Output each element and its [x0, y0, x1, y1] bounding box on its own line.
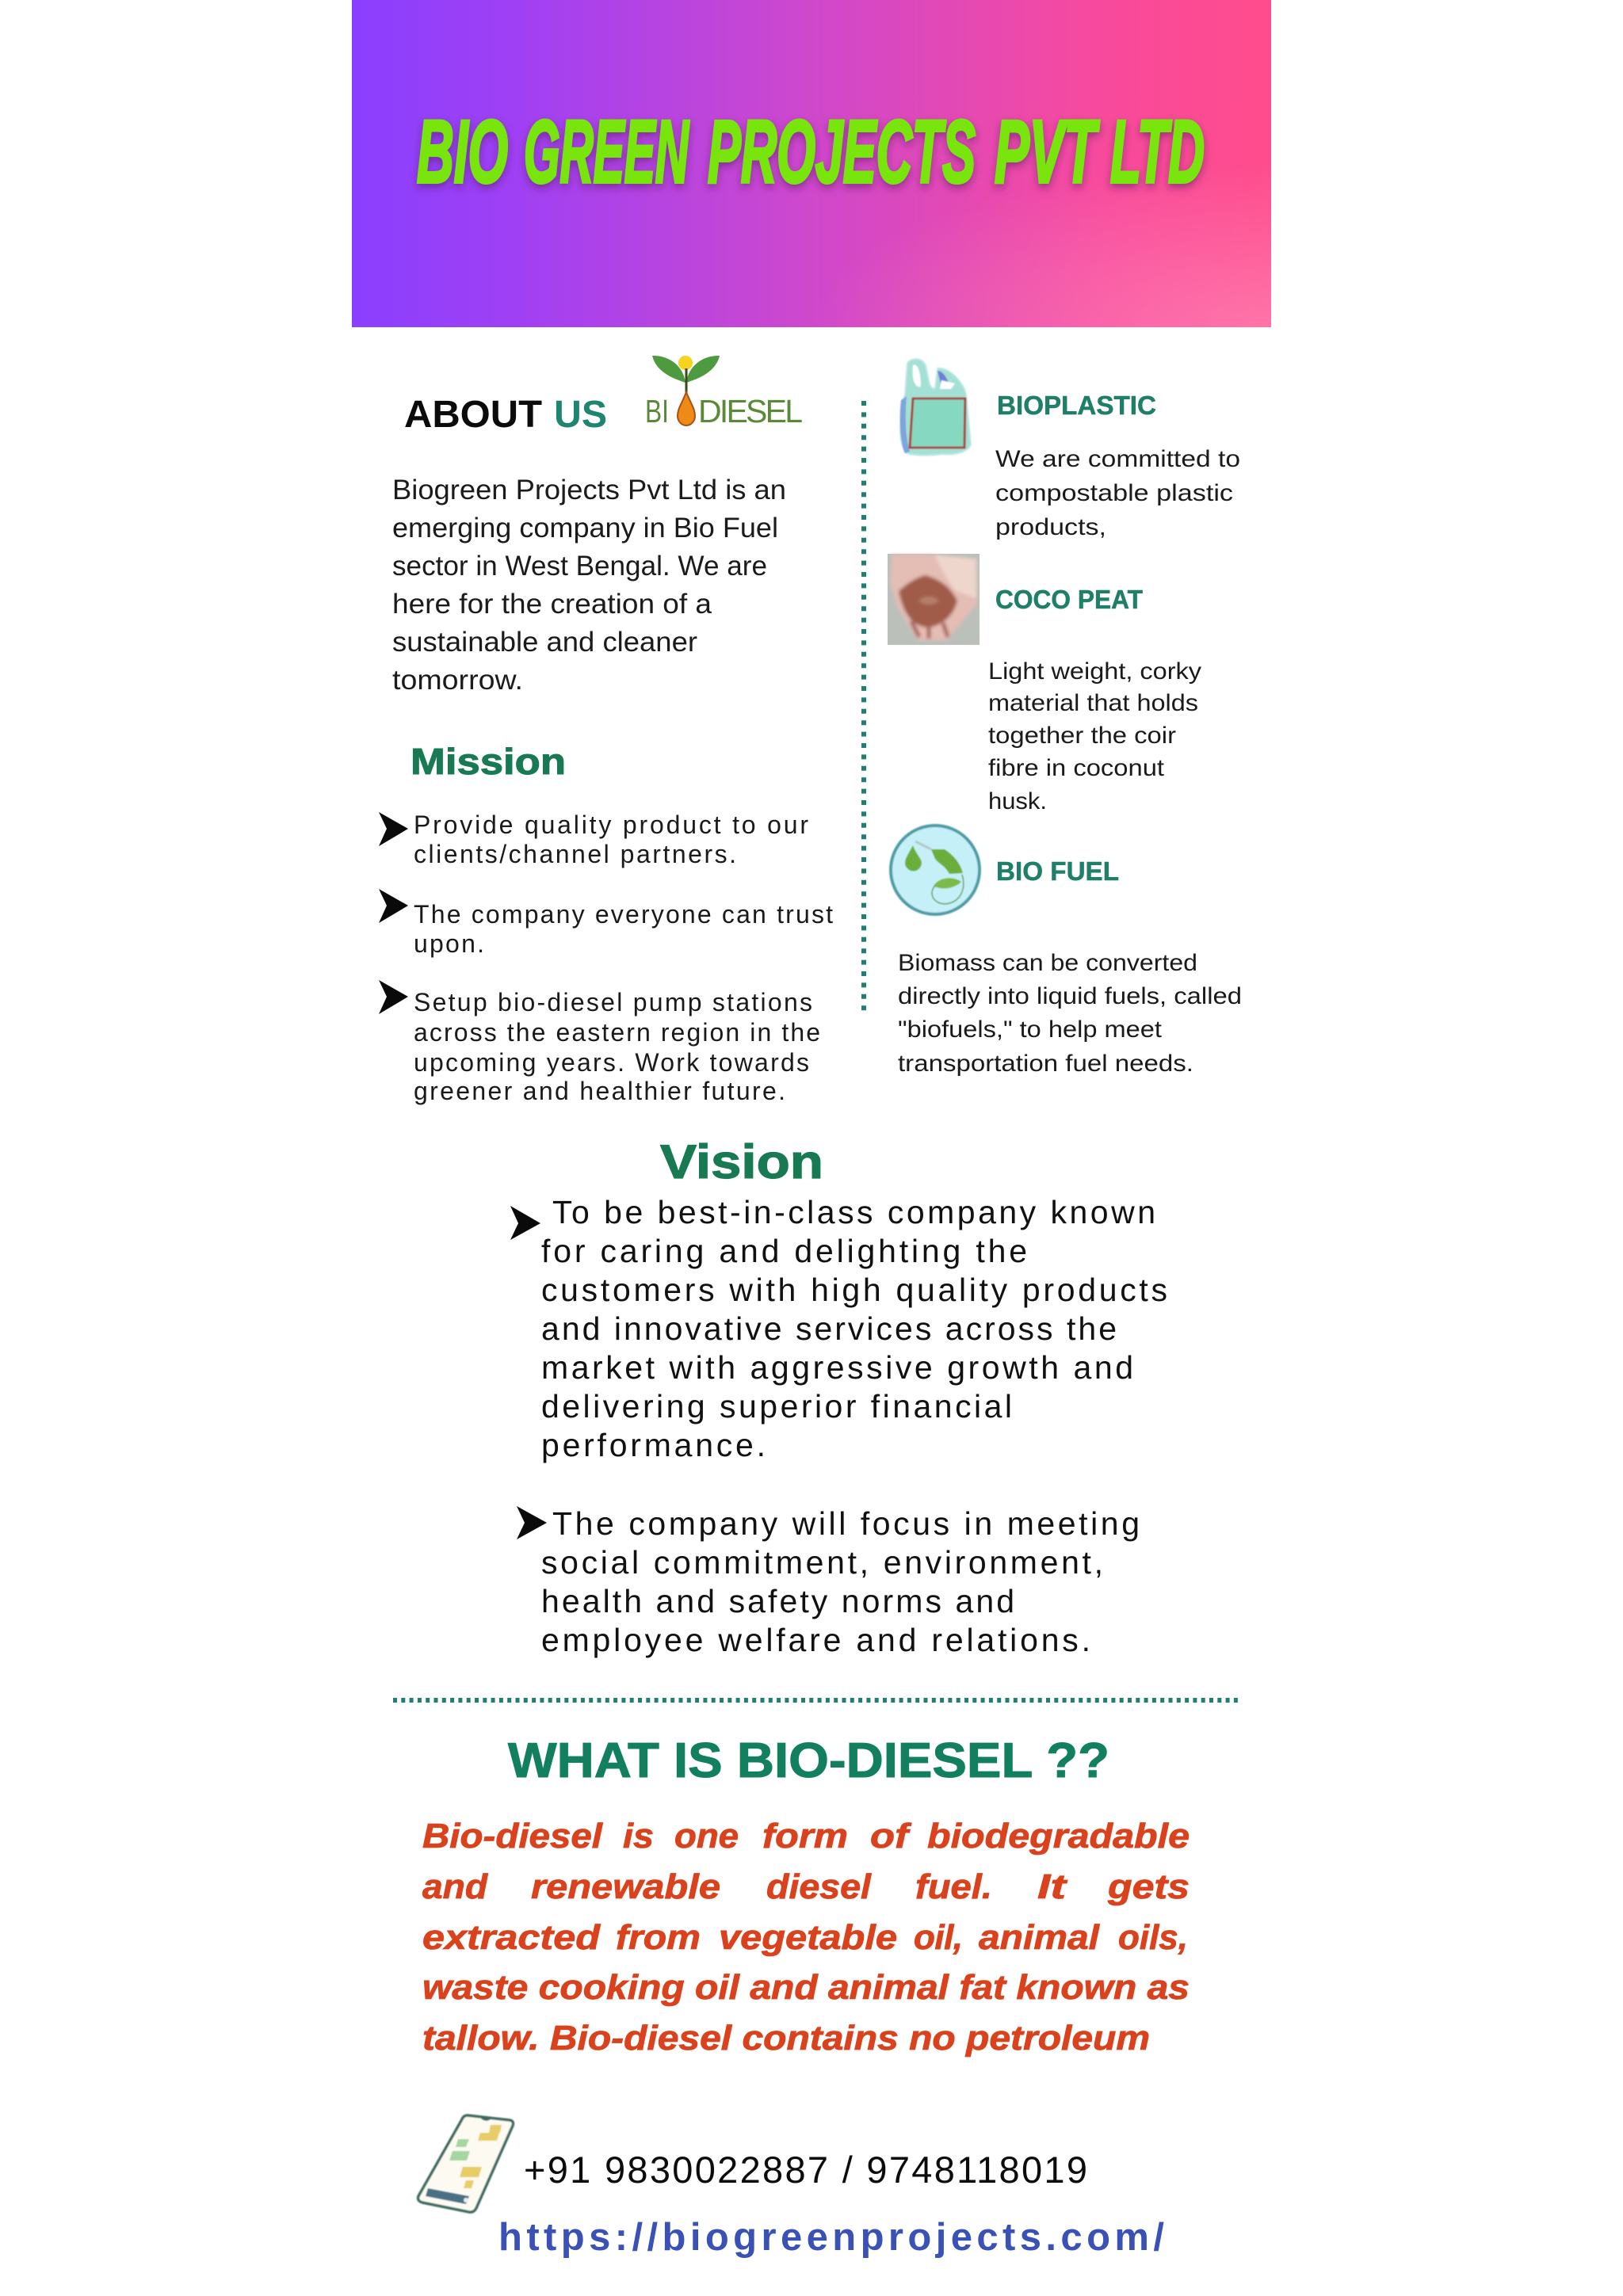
text: phone number: +91 9830022887 / 9748118019 — [524, 2149, 1087, 2191]
text: coco peat: material that holds — [988, 690, 1198, 716]
text: coco peat — [988, 658, 1201, 814]
icon: arrow vision 1 — [510, 1206, 540, 1240]
text: bio-diesel definition: oils, — [1118, 1918, 1188, 1957]
mission item 1: Provide quality product to our — [414, 810, 808, 839]
heading: coco peat: COCO PEAT — [995, 585, 1143, 614]
icon: bioplastic bag — [900, 359, 971, 456]
text: vision statement 1: and innovative services across the — [541, 1310, 1117, 1347]
panel: mission — [379, 741, 833, 1105]
header banner — [352, 0, 1271, 327]
logo: biodiesel: BI — [645, 393, 669, 429]
logo: biodiesel — [645, 356, 803, 429]
text: bio-diesel definition: diesel — [766, 1867, 872, 1906]
panel: vision — [510, 1135, 1167, 1658]
text: bio fuel: Biomass can be converted — [898, 950, 1197, 976]
title: PVT — [995, 102, 1100, 201]
text: bio-diesel definition: waste cooking oil and animal fat known as — [422, 1968, 1190, 2007]
text: bioplastic — [995, 446, 1240, 540]
text: vision statement 1: delivering superior financial — [541, 1388, 1012, 1425]
text: coco peat: together the coir — [988, 723, 1176, 749]
text: vision statement 1: To be best-in-class company known — [552, 1194, 1155, 1230]
text: bio-diesel definition: is — [623, 1817, 654, 1855]
mission item 3: upcoming years. Work towards — [414, 1048, 809, 1077]
text: bio-diesel definition: form — [762, 1817, 848, 1855]
text: about paragraph: Biogreen Projects Pvt Ltd is an — [392, 475, 786, 505]
text: vision statement 2: health and safety norms and — [541, 1583, 1014, 1619]
title: PROJECTS — [708, 102, 976, 201]
text: vision statement 2: social commitment, environment, — [541, 1544, 1103, 1581]
text: bio-diesel definition — [422, 1817, 1190, 2058]
text: bio-diesel definition: renewable — [531, 1867, 720, 1906]
panel: about us — [392, 356, 803, 696]
heading: vision: Vision — [660, 1135, 823, 1188]
mission item 1 — [414, 810, 808, 868]
heading: bioplastic: BIOPLASTIC — [997, 391, 1156, 420]
text: vision statement 1: customers with high quality products — [541, 1272, 1167, 1308]
text: vision statement 1 — [541, 1194, 1167, 1463]
text: bio-diesel definition: Bio-diesel — [422, 1817, 603, 1855]
text: about paragraph: emerging company in Bio Fuel — [392, 513, 778, 543]
text: coco peat: husk. — [988, 788, 1047, 814]
icon: bio fuel — [891, 826, 980, 914]
mission item 3: Setup bio-diesel pump stations — [414, 988, 812, 1016]
text: about paragraph — [392, 475, 786, 696]
heading: about us: US — [554, 394, 607, 436]
text: bioplastic: products, — [995, 514, 1106, 540]
text: bio-diesel definition: of — [870, 1817, 912, 1855]
text: about paragraph: here for the creation of a — [392, 589, 712, 620]
text: website url: https://biogreenprojects.com/ — [498, 2216, 1164, 2259]
text: coco peat: Light weight, corky — [988, 658, 1201, 685]
text: bio-diesel definition: tallow. Bio-diesel contains no petroleum — [422, 2019, 1150, 2058]
title: BIO — [417, 102, 508, 201]
heading: what is bio-diesel: WHAT IS BIO-DIESEL ?? — [508, 1733, 1109, 1788]
panel: products — [888, 359, 1242, 1077]
text: bio-diesel definition: It — [1037, 1867, 1068, 1906]
text: bio-diesel definition: vegetable — [719, 1918, 897, 1957]
text: bio-diesel definition: animal — [979, 1918, 1100, 1957]
text: bio-diesel definition: one — [674, 1817, 739, 1855]
mission item 1: clients/channel partners. — [414, 840, 736, 868]
icon: arrow vision 2 — [517, 1506, 547, 1539]
title — [417, 102, 1205, 201]
title: GREEN — [524, 102, 689, 201]
text: vision statement 1: market with aggressive growth and — [541, 1349, 1133, 1386]
title: LTD — [1110, 102, 1205, 201]
text: bio fuel — [898, 950, 1242, 1077]
text: bio-diesel definition: and — [422, 1867, 488, 1906]
heading: bio fuel: BIO FUEL — [996, 856, 1119, 886]
text: bio fuel: "biofuels," to help meet — [898, 1016, 1163, 1043]
mission item 2: upon. — [414, 929, 484, 958]
mission item 2: The company everyone can trust — [414, 900, 833, 929]
icon: arrow 1 — [379, 812, 408, 846]
icon: arrow 2 — [379, 889, 408, 923]
text: bio-diesel definition: from — [616, 1918, 701, 1957]
text: vision statement 1: performance. — [541, 1427, 766, 1463]
icon: arrow 3 — [379, 980, 408, 1014]
text: bioplastic: We are committed to — [995, 446, 1240, 472]
text: about paragraph: sector in West Bengal. We are — [392, 551, 767, 582]
text: bio-diesel definition: biodegradable — [927, 1817, 1190, 1855]
icon: phone — [418, 2115, 514, 2212]
heading: mission: Mission — [411, 741, 566, 782]
text: vision statement 2 — [541, 1505, 1140, 1658]
panel: contact — [418, 2115, 1164, 2259]
text: about paragraph: sustainable and cleaner — [392, 627, 697, 658]
logo: biodiesel: DIESEL — [698, 393, 803, 429]
text: vision statement 1: for caring and delighting the — [541, 1233, 1027, 1269]
text: vision statement 2: employee welfare and relations. — [541, 1622, 1090, 1658]
image: coco peat in hands — [888, 554, 980, 645]
heading: about us: ABOUT — [404, 394, 542, 436]
text: vision statement 2: The company will focus in meeting — [552, 1505, 1140, 1542]
text: bioplastic: compostable plastic — [995, 480, 1233, 506]
mission item 3: greener and healthier future. — [414, 1077, 785, 1105]
text: bio-diesel definition: extracted — [422, 1918, 601, 1957]
text: bio fuel: directly into liquid fuels, called — [898, 983, 1242, 1009]
text: coco peat: fibre in coconut — [988, 755, 1165, 781]
text: bio-diesel definition: gets — [1107, 1867, 1190, 1906]
text: bio-diesel definition: oil, — [914, 1918, 963, 1957]
mission item 3 — [414, 988, 820, 1105]
panel: what is bio-diesel — [422, 1733, 1190, 2058]
mission item 3: across the eastern region in the — [414, 1018, 820, 1047]
text: bio fuel: transportation fuel needs. — [898, 1051, 1193, 1077]
mission item 2 — [414, 900, 833, 958]
text: about paragraph: tomorrow. — [392, 665, 523, 696]
text: bio-diesel definition: fuel. — [915, 1867, 992, 1906]
